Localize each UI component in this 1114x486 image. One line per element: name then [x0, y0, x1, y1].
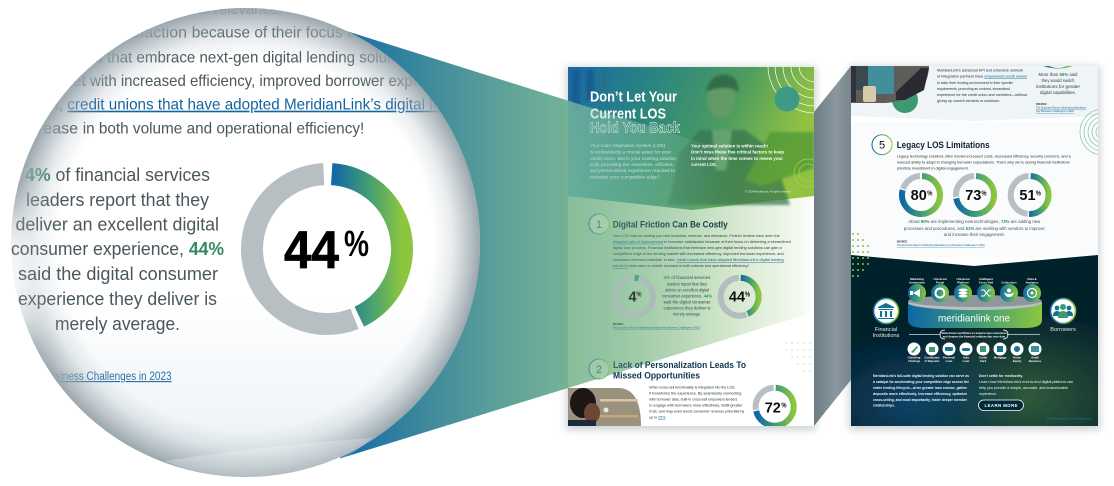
- platform disc: [908, 295, 1042, 328]
- section 1 body text: solutions have seen a notable increase in both volume and operational efficiency!: [613, 263, 749, 268]
- section 5 body text: Legacy technology solutions often involve increased costs, decreased efficiency, security concerns, and a: [897, 154, 1071, 158]
- section 5 caption: processes and procedures, and 51% are working with vendors to improve: [904, 226, 1045, 231]
- donut chart 73%: 73: [965, 188, 981, 204]
- closing paragraph left: entire lending lifecycle—drive greater loan volume, gather: [873, 385, 967, 390]
- hero title: Current LOS: [590, 105, 666, 122]
- section 2 heading: 2: [596, 364, 602, 376]
- closing paragraph left: deposits more effectively, increase efficiency, optimize: [873, 391, 968, 396]
- section 2 body text: trust, and may even boost consumer revenue potential by: [649, 408, 744, 414]
- hero intro text: is undoubtedly a crucial asset for your: [590, 150, 672, 154]
- hero title: Hold You Back: [590, 120, 681, 137]
- platform labels: [909, 278, 1038, 284]
- closing paragraph right: Learn how MeridianLink’s end-to-end digital platform can: [979, 379, 1073, 384]
- learn more button: [978, 400, 1024, 410]
- donut chart 4%: %: [636, 290, 642, 298]
- closing paragraph right: [979, 373, 1073, 396]
- hero banner: [568, 67, 814, 210]
- donut chart 72%: %: [781, 400, 787, 410]
- magnified paragraph: Fintech: [286, 1, 338, 18]
- borrowers node: [1050, 298, 1076, 333]
- closing paragraph left: relationships.: [873, 403, 895, 408]
- platform labels: Marketing: [910, 277, 924, 281]
- product labels: Mortgage: [994, 356, 1007, 360]
- donut chart 4%: [615, 278, 653, 316]
- hero intro text: maintain your competitive edge?: [590, 174, 661, 180]
- section 1 source: The Executive Report: Addressing Mandatory Key Business Challenges in 2023: [613, 326, 700, 330]
- hero callout text: Don’t miss these five critical factors to keep: [691, 150, 784, 154]
- section 2 body text: it transforms the experience. By seamlessly connecting: [649, 390, 741, 396]
- donut caption: 4% of financial services: [664, 275, 710, 280]
- workflow connector: Data-driven workflows to acquire new customers: [941, 331, 1007, 335]
- icon: concentric arcs and circle: [768, 67, 814, 188]
- donut chart 72%: 72: [765, 401, 781, 417]
- section 1 source: SOURCE:: [613, 323, 624, 326]
- magnified paragraph: institutions: [27, 49, 103, 66]
- section 2 photo: [568, 388, 641, 426]
- section 1 body text: Your LOS may be costing you new business, revenue, and relevance. Fintech lenders have seen the: [613, 233, 780, 238]
- magnifying lens: [11, 1, 480, 477]
- donut chart fragment: [1043, 66, 1073, 68]
- hero banner: © 2024 MeridianLink. All rights reserved.: [745, 190, 791, 194]
- magnified 44% donut chart: 44: [284, 221, 339, 280]
- section 2 heading: Lack of Personalization Leads To: [613, 360, 746, 371]
- section 4 source: Key Business Challenges in 2023: [1036, 109, 1074, 113]
- 55% callout text: More than 55% said: [1038, 72, 1078, 77]
- magnified paragraph: [15, 1, 478, 137]
- hero callout text: current LOS.: [691, 162, 717, 167]
- closing paragraph right: help you provide a simple, accurate, and customizable: [979, 385, 1069, 390]
- magnified caption: experience they deliver is: [18, 288, 217, 309]
- magnified caption: consumer experience, 44%: [11, 238, 224, 259]
- section 4 body text: MeridianLink’s advanced API and extensive network: [937, 68, 1023, 72]
- section 4 body text: to tailor their lending environment to their specific: [937, 80, 1013, 85]
- section 2 body text: When cross-sell functionality is integrated into the LOS,: [649, 384, 735, 390]
- financial institutions node: Institutions: [873, 333, 900, 339]
- product labels: Business: [1029, 359, 1042, 363]
- donut caption: leaders report that they: [667, 282, 708, 286]
- magnified paragraph: in both volume and operational efficiency!: [83, 120, 364, 137]
- platform labels: Portal: [936, 280, 944, 284]
- hero intro text: credit union. But is your existing solution: [590, 156, 677, 161]
- page 2 shadow: [849, 66, 1100, 430]
- workflow connector: and deepen the financial relationship over time: [943, 334, 1006, 338]
- magnified paragraph: with increased efficiency, improved borrower experience,: [89, 73, 466, 90]
- product labels: Certificates: [924, 356, 940, 360]
- donut chart 80%: %: [927, 189, 933, 198]
- page 1: [568, 67, 814, 426]
- section 5 body text: prioritize investment in digital engagement.: [897, 166, 969, 170]
- section 1 body text: sharpest rate of improvement in borrower satisfaction because of their focus on delivering a streamlined: [613, 239, 791, 244]
- hero callout text: in mind when the time comes to renew your: [691, 156, 783, 161]
- donut chart 51%: [1011, 176, 1049, 214]
- financial institutions node: [873, 298, 900, 339]
- section 4 body text: of integration partners have empowered credit unions: [937, 74, 1027, 78]
- donut chart 80%: 80: [911, 188, 927, 204]
- magnified caption: merely average.: [55, 313, 180, 334]
- page 2 photo: [851, 66, 929, 103]
- donut chart 72%: [756, 388, 794, 426]
- donut caption: said the digital consumer: [664, 300, 711, 304]
- section 5 heading: Legacy LOS Limitations: [897, 140, 990, 151]
- donut chart 73%: [956, 176, 994, 214]
- section 4 body text: requirements, promoting an evolved, streamlined: [937, 86, 1010, 91]
- green dot pattern: [852, 233, 869, 277]
- section 1 heading: Digital Friction Can Be Costly: [613, 220, 728, 230]
- fold connecting the two pages: [814, 66, 851, 426]
- donut chart 80%: [902, 176, 940, 214]
- hero intro text: Your Loan Origination System (LOS): [590, 143, 666, 148]
- closing paragraph left: a catalyst for accelerating your competitive edge across the: [873, 379, 970, 384]
- section 5 heading: 5: [879, 140, 885, 152]
- 55% callout text: [1036, 72, 1081, 95]
- icon: concentric green arcs: [1080, 109, 1098, 155]
- product labels: Loan: [946, 359, 953, 363]
- borrowers node: Borrowers: [1050, 327, 1076, 333]
- product labels: Personal: [943, 356, 955, 360]
- product labels: Loan: [963, 359, 970, 363]
- page 2: [851, 62, 1114, 426]
- section 1 body text: increased revenue potential. In fact, credit unions that have adopted MeridianLink’s digital lending: [613, 257, 784, 262]
- product labels: / Savings: [908, 359, 921, 363]
- donut chart 44%: [721, 278, 759, 316]
- 55% callout text: they would switch: [1042, 78, 1075, 83]
- magnified caption: said the digital consumer: [18, 263, 218, 284]
- section 5 caption: and increase their engagement.: [944, 232, 1005, 237]
- section 5 source: The Executive Report: Addressing Mandatory Key Business Challenges in 2023: [897, 243, 985, 247]
- donut chart 73%: %: [981, 189, 987, 198]
- product labels: Checking: [908, 356, 921, 360]
- platform disc: meridianlink one: [938, 313, 1010, 325]
- magnified caption: 4% of financial services: [25, 164, 210, 185]
- magnified 44% donut chart: [252, 174, 402, 324]
- donut caption: merely average.: [673, 312, 701, 316]
- magnified source link: Business Challenges in 2023: [44, 371, 172, 383]
- section 1 body text: competitive edge in the lending market with increased efficiency, improved borrower experience, and: [613, 251, 784, 256]
- closing paragraph left: cross-selling, and most importantly, foster deeper member: [873, 397, 967, 402]
- platform module icons: [908, 284, 1041, 302]
- product labels: Small: [1031, 356, 1039, 360]
- learn more button: LEARN MORE: [984, 403, 1018, 408]
- product labels: Home: [1013, 356, 1021, 360]
- donut chart 44%: %: [745, 290, 750, 298]
- platform labels: Universal: [956, 277, 970, 281]
- section 5 heading: [872, 135, 990, 155]
- product labels: Credit: [979, 356, 987, 360]
- platform labels: Collections: [1001, 280, 1017, 284]
- magnifier beam: [340, 29, 568, 458]
- section 5 body text: reduced ability to adapt to changing borrower expectations. That’s why we’re seeing financial institutions: [897, 160, 1070, 164]
- magnified caption: deliver an excellent digital: [16, 214, 219, 234]
- section 4 source: The Executive Report: Addressing Mandatory: [1036, 105, 1087, 109]
- workflow connector: [909, 330, 1040, 339]
- magnified paragraph: satisfaction: [107, 25, 187, 42]
- hero title: Don’t Let Your: [590, 89, 677, 106]
- magnified paragraph: relevance.: [214, 1, 282, 18]
- dot pattern: [785, 342, 811, 372]
- magnified paragraph: on delivering: [347, 25, 438, 42]
- donut caption: [662, 275, 712, 316]
- platform labels: Data &: [1027, 277, 1037, 281]
- section 5 source: SOURCE:: [897, 240, 908, 244]
- hero intro text: truly providing the seamless, efficient,: [590, 162, 674, 167]
- magnified 44% donut chart: %: [344, 223, 369, 264]
- platform labels: Analytics: [1026, 280, 1039, 284]
- page 1 shadow: [566, 67, 816, 430]
- section 2 body text: [649, 384, 744, 420]
- donut caption: deliver an excellent digital: [665, 288, 709, 292]
- product icons: [908, 342, 1042, 356]
- platform labels: Universal: [933, 277, 947, 281]
- financial institutions node: Financial: [875, 327, 897, 333]
- hero intro text: and personalized experience required to: [590, 168, 676, 173]
- section 1 heading: [589, 214, 728, 234]
- donut chart 51%: %: [1036, 189, 1041, 198]
- magnified paragraph: market: [37, 73, 87, 90]
- magnified paragraph: In fact,: [15, 97, 63, 114]
- product labels: of Deposits: [924, 359, 940, 363]
- section 1 body text: digital loan process. Financial institutions that embrace next-gen digital lending solutions can gain a: [613, 245, 783, 250]
- magnified caption: [11, 164, 224, 334]
- section 5 body text: [897, 154, 1071, 170]
- closing paragraph left: MeridianLink’s full-suite digital lending solution can serve as: [873, 373, 970, 378]
- donut chart 4%: 4: [628, 290, 637, 306]
- platform labels: Cross-Sell: [979, 280, 993, 284]
- magnified paragraph: that embrace next-gen digital lending solutions: [107, 49, 419, 66]
- magnified paragraph: credit unions that have adopted MeridianLink’s digital lending: [67, 97, 478, 114]
- magnified caption: leaders report that they: [26, 189, 210, 210]
- hero callout text: Your optimal solution is within reach!: [691, 144, 768, 148]
- section 1 body text: [613, 233, 791, 268]
- 55% callout text: digital capabilities.: [1040, 90, 1076, 95]
- section 4 body text: experience for the credit union and members—without: [937, 92, 1028, 97]
- section 4 source: SOURCE:: [1036, 103, 1047, 106]
- copyright: © 2024 MeridianLink. All rights reserved.: [1046, 418, 1092, 420]
- green circle behind photo: [892, 94, 918, 113]
- platform labels: Platform: [957, 280, 969, 284]
- product labels: [908, 356, 1042, 363]
- dark platform panel: [851, 255, 1098, 426]
- section 4 body text: giving up current vendors or solutions.: [937, 98, 1000, 103]
- product labels: Equity: [1013, 359, 1022, 363]
- section 2 heading: Missed Opportunities: [613, 371, 700, 382]
- section 4 source: [1036, 103, 1087, 113]
- section 2 body text: up to 25%.: [649, 414, 666, 420]
- closing paragraph right: Don’t settle for mediocrity.: [979, 373, 1023, 378]
- hero intro text: [590, 143, 677, 180]
- platform labels: Automation: [909, 280, 925, 284]
- section 5 source: [897, 240, 985, 247]
- section 1 source: [613, 323, 700, 330]
- donut chart 51%: 51: [1019, 188, 1036, 204]
- magnified paragraph: increase: [18, 120, 78, 137]
- closing paragraph left: [873, 373, 970, 408]
- closing paragraph right: experience.: [979, 391, 997, 396]
- magnified paragraph: and: [183, 1, 210, 18]
- donut caption: consumer experience, 44%: [662, 294, 712, 298]
- 55% callout text: institutions for greater: [1036, 84, 1081, 89]
- section 2 body text: with borrower data, built-in cross-sell empowers lenders: [649, 396, 737, 402]
- section 2 body text: to engage with borrowers more effectively, instill greater: [649, 402, 743, 408]
- section 1 green background: [568, 196, 806, 388]
- section 4 body text: [937, 68, 1028, 103]
- section 2 heading: [589, 359, 746, 382]
- donut caption: experience they deliver is: [664, 306, 710, 310]
- product labels: Card: [980, 359, 986, 363]
- beam wash over page: [568, 100, 718, 388]
- donut chart 44%: 44: [729, 290, 745, 306]
- platform labels: Intelligent: [979, 277, 993, 281]
- product labels: Auto: [963, 356, 969, 360]
- section 1 heading: 1: [596, 219, 602, 231]
- hero title: [590, 92, 680, 133]
- magnified paragraph: because of their focus: [192, 25, 343, 42]
- section 5 caption: [904, 219, 1045, 237]
- section 5 caption: About 80% are implementing new technologies, 73% are adding new: [908, 219, 1041, 224]
- hero callout text: [691, 144, 784, 167]
